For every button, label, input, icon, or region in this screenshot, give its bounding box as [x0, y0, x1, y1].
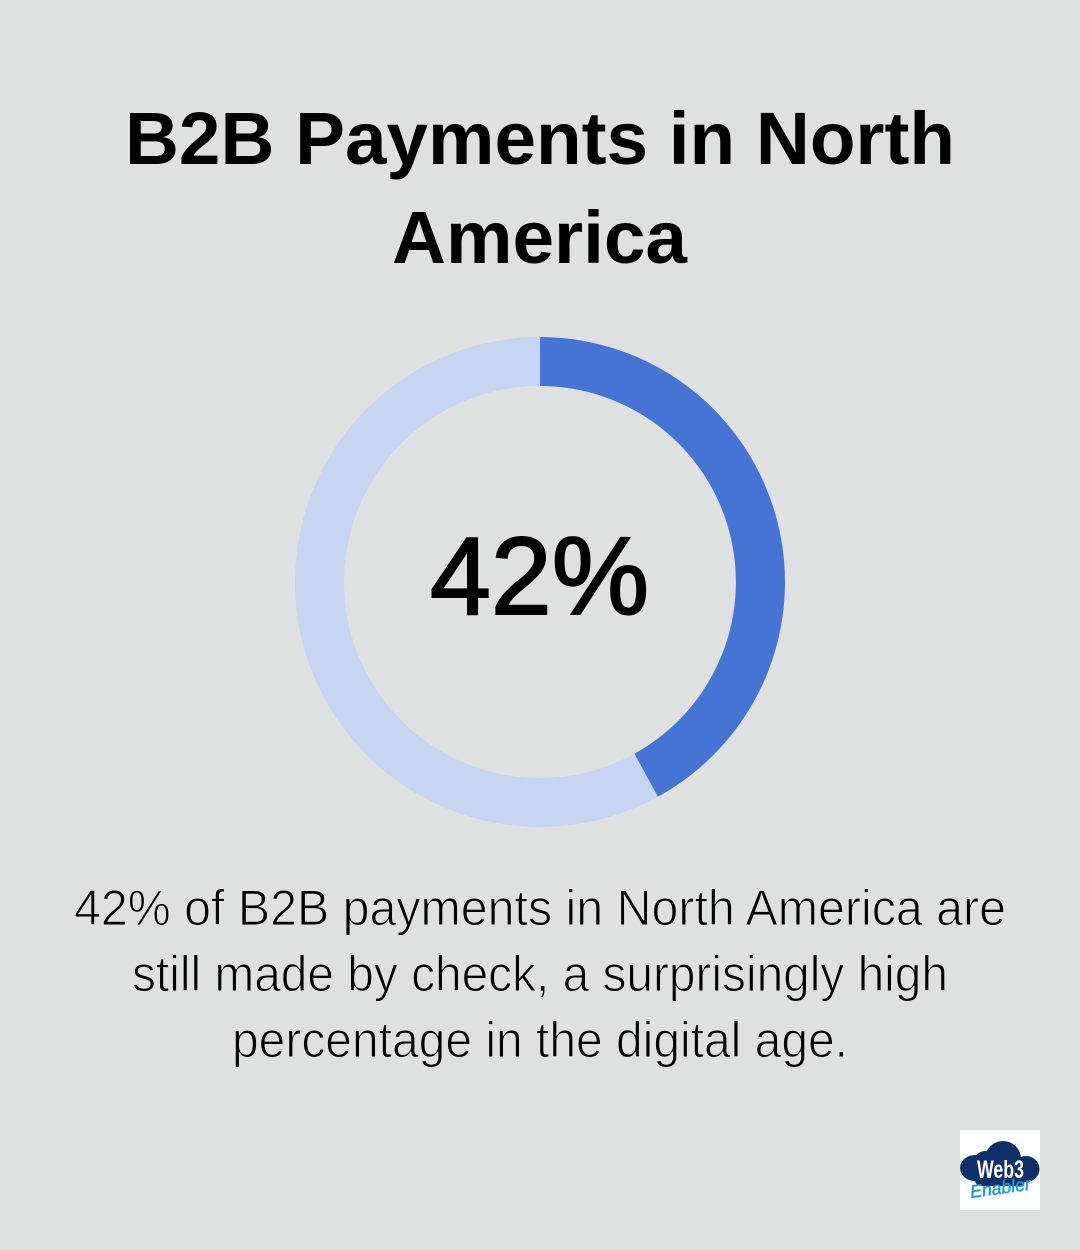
logo: Web3 Enabler [960, 1130, 1040, 1210]
logo word: Enabler: Enabler [969, 1174, 1033, 1202]
donut chart: 42% [320, 337, 785, 802]
logo word: Web3: Web3 [977, 1156, 1024, 1184]
description text: 42% of B2B payments in North America are [74, 880, 1006, 936]
center value: 42% [430, 515, 649, 638]
description text [74, 880, 1006, 1068]
title: America [392, 196, 688, 279]
title: B2B Payments in North [125, 97, 955, 180]
donut track [320, 362, 760, 802]
description text: percentage in the digital age. [232, 1012, 848, 1068]
description text: still made by check, a surprisingly high [132, 946, 948, 1002]
icon: cloud [960, 1141, 1040, 1186]
logo background [960, 1130, 1040, 1210]
donut value segment [540, 337, 785, 797]
title [125, 97, 955, 279]
